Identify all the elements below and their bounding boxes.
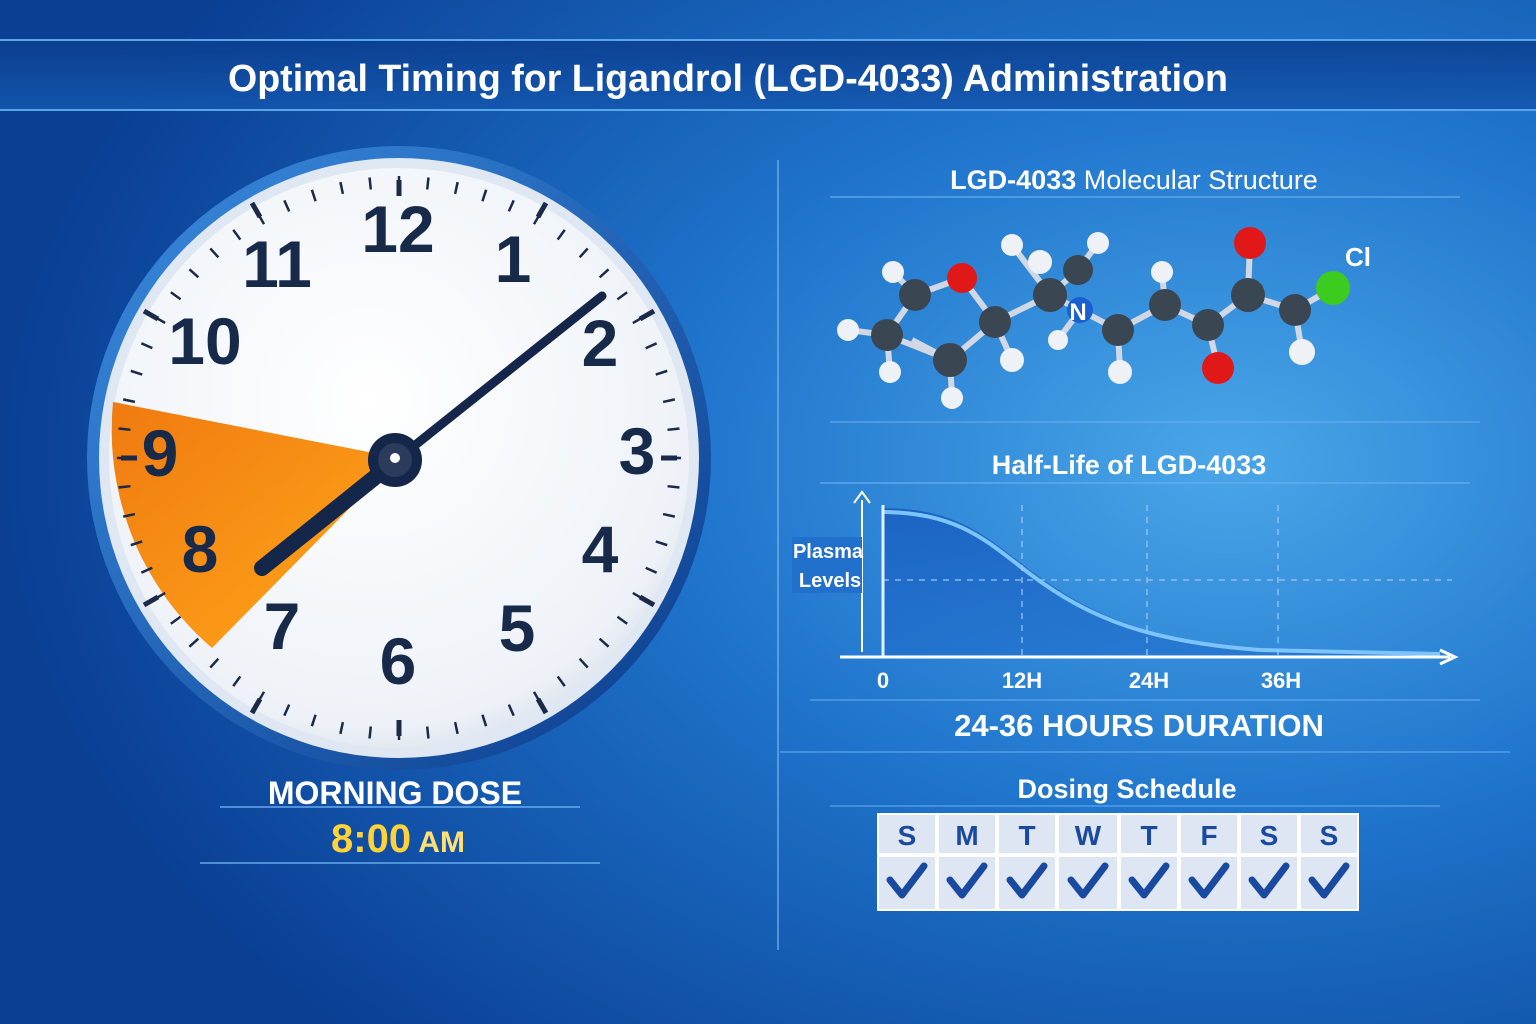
half-life chart: Plasma bbox=[793, 541, 864, 563]
clock numbers bbox=[142, 192, 655, 698]
dosing schedule grid bbox=[877, 813, 1359, 911]
morning dose label bbox=[200, 775, 600, 863]
molecule bbox=[837, 227, 1371, 409]
clock numbers: 3 bbox=[619, 414, 655, 488]
ticks bbox=[121, 180, 677, 736]
dosing schedule grid: M bbox=[955, 820, 979, 851]
title: Optimal Timing for Ligandrol (LGD-4033) Administration bbox=[228, 58, 1228, 100]
clock numbers: 7 bbox=[264, 589, 300, 663]
dosing schedule grid: S bbox=[898, 820, 916, 851]
duration label: 24-36 HOURS DURATION bbox=[954, 708, 1324, 743]
half-life chart bbox=[792, 492, 1455, 693]
clock numbers: 10 bbox=[168, 304, 242, 378]
dosing schedule grid: W bbox=[1075, 820, 1102, 851]
half-life chart: 36H bbox=[1261, 668, 1301, 693]
molecule: N bbox=[1069, 299, 1087, 326]
dosing schedule heading: Dosing Schedule bbox=[1017, 774, 1237, 804]
half-life chart: Levels bbox=[799, 570, 861, 592]
vertical divider bbox=[777, 160, 779, 950]
clock numbers: 1 bbox=[495, 222, 531, 296]
clock numbers: 9 bbox=[142, 416, 178, 490]
dosing schedule grid: S bbox=[1260, 820, 1278, 851]
dosing schedule grid: T bbox=[1140, 820, 1158, 851]
dosing schedule grid: S bbox=[1320, 820, 1338, 851]
morning dose label: MORNING DOSE bbox=[268, 775, 522, 811]
half-life chart: 12H bbox=[1002, 668, 1042, 693]
clock numbers: 11 bbox=[242, 227, 312, 301]
molecule heading: LGD-4033 Molecular Structure bbox=[950, 165, 1318, 195]
minute ticks bbox=[123, 182, 675, 734]
clock numbers: 5 bbox=[499, 591, 535, 665]
half-life chart: 24H bbox=[1129, 668, 1169, 693]
dosing schedule grid: F bbox=[1200, 820, 1218, 851]
clock numbers: 2 bbox=[582, 306, 618, 380]
clock numbers: 6 bbox=[380, 624, 416, 698]
dosing schedule grid: T bbox=[1018, 820, 1036, 851]
title band bbox=[0, 40, 1536, 110]
clock numbers: 12 bbox=[361, 192, 435, 266]
clock bbox=[87, 146, 711, 770]
molecule: Cl bbox=[1345, 242, 1371, 272]
hands bbox=[262, 458, 399, 568]
highlighted dose window bbox=[112, 402, 399, 648]
clock numbers: 4 bbox=[582, 512, 619, 586]
half-life chart: 0 bbox=[877, 668, 889, 693]
half-life heading: Half-Life of LGD-4033 bbox=[992, 450, 1266, 480]
morning dose label: 8:00 AM bbox=[331, 817, 465, 861]
clock numbers: 8 bbox=[182, 512, 218, 586]
